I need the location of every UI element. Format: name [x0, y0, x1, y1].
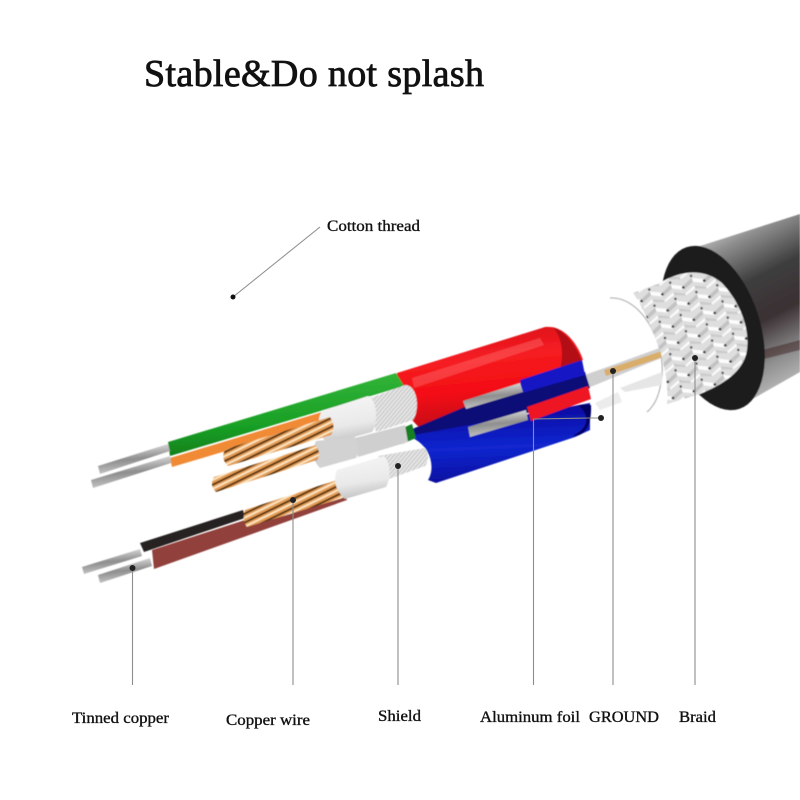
middle copper bundle: [212, 445, 319, 492]
silver strands green pair: [91, 444, 171, 488]
label: aluminum foil: Aluminum foil: [480, 709, 580, 726]
silver strand lower: [468, 410, 528, 437]
upper shield: [368, 385, 417, 432]
upper copper bundle: [223, 417, 334, 466]
leader: braid: [692, 355, 698, 685]
leader: tinned copper: [130, 565, 136, 685]
cable illustration: [82, 214, 800, 583]
label: shield: Shield: [378, 708, 421, 725]
lower copper bundle: [244, 477, 349, 527]
brown wire: [152, 495, 347, 569]
blue tube: [408, 403, 591, 483]
metal braid: [633, 272, 748, 404]
upper white insulator: [319, 396, 376, 444]
grey rear shield: [355, 425, 408, 457]
label: tinned copper: Tinned copper: [72, 710, 170, 727]
lower shield: [378, 448, 428, 480]
tinned strands: [82, 549, 152, 583]
ground wire: [585, 346, 666, 388]
outer black jacket: [642, 214, 800, 423]
label: cotton thread: Cotton thread: [327, 218, 420, 235]
black wire: [140, 510, 245, 552]
grey insulator: [313, 437, 358, 468]
green tube sliver: [398, 424, 416, 444]
label: copper wire: Copper wire: [226, 712, 310, 729]
silver strand upper: [463, 383, 523, 409]
orange wire: [170, 412, 324, 467]
dark blue gap: [410, 372, 590, 442]
leader: aluminum foil: [534, 415, 604, 685]
leader: shield: [395, 463, 401, 685]
leader: copper wire: [290, 497, 296, 685]
label: braid: Braid: [679, 709, 716, 726]
red tube: [397, 327, 583, 428]
title: Stable&Do not splash: [144, 53, 484, 95]
blue wire: [520, 360, 585, 393]
leader: cotton thread: [230, 227, 320, 300]
label: ground: GROUND: [589, 709, 659, 726]
leader: ground: [610, 368, 616, 685]
green wire: [168, 373, 404, 456]
lower white insulator: [335, 456, 390, 499]
aluminum foil sleeve: [595, 298, 662, 412]
red wire: [527, 386, 591, 421]
